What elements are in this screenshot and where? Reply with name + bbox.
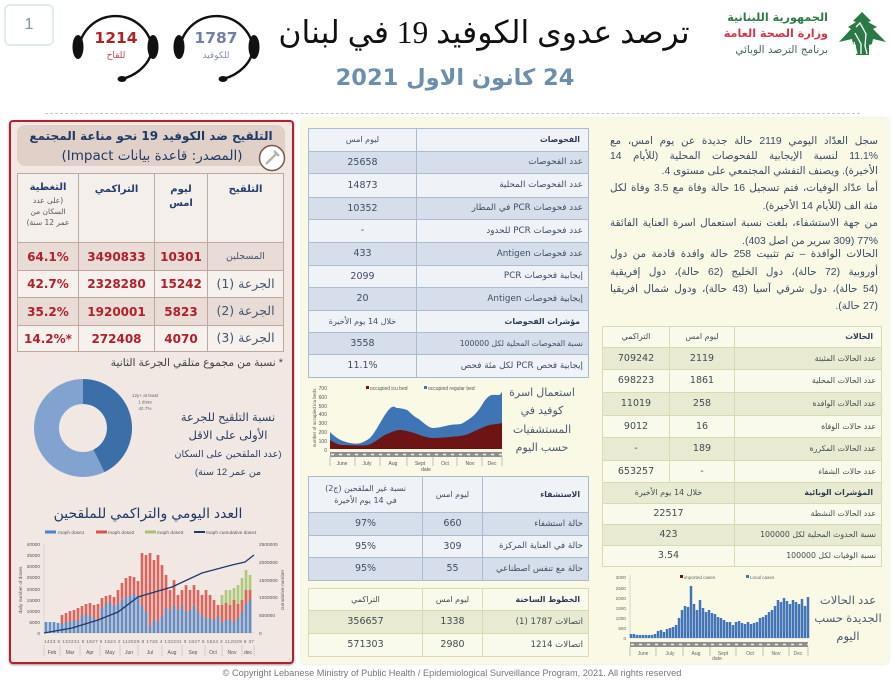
table: hotlines: اتصالات 1214 <box>531 640 583 650</box>
hotline headset: covid 1787: 1787 <box>194 29 238 47</box>
table: cases: 9012 <box>624 421 648 432</box>
chart: hospital bed occupancy: 500 <box>319 404 327 410</box>
page number box <box>4 4 54 46</box>
icon: syringe badge <box>258 144 286 172</box>
ministry logo text: الجمهورية اللبنانية <box>727 11 828 24</box>
chart: daily and cumulative vaccinated: Apr <box>86 650 94 656</box>
chart: hospital bed occupancy: 100 <box>319 439 327 445</box>
vaccination table: التغطية <box>30 182 66 193</box>
hotline headset: vaccine 1214: للقاح <box>107 50 125 60</box>
donut caption: من عمر 12 سنة) <box>195 467 261 478</box>
table: cases: خلال 14 يوم الأخيرة <box>635 488 702 497</box>
title: ترصد عدوى الكوفيد 19 في لبنان <box>278 15 690 50</box>
chart: daily and cumulative vaccinated: Jul <box>147 650 153 656</box>
table: tests: ليوم امس <box>346 135 379 144</box>
hotline headset: vaccine 1214: 1214 <box>94 29 138 47</box>
table: tests: 10352 <box>347 203 378 214</box>
chart: hospital bed occupancy: 0 <box>324 448 327 454</box>
table: tests: مؤشرات الفحوصات <box>505 317 580 326</box>
hospital chart caption: حسب اليوم <box>516 442 568 454</box>
vaccination table: 5823 <box>164 304 198 318</box>
vaccination heading: التلقيح ضد الكوفيد 19 نحو مناعة المجتمع <box>29 129 273 143</box>
new cases chart caption: الجديدة حسب <box>814 613 882 625</box>
chart: new cases per day: Sept <box>718 651 729 657</box>
table: tests: 2099 <box>350 271 375 282</box>
table: hotlines: 1338 <box>440 616 465 627</box>
vaccination table <box>17 173 284 352</box>
table: cases: عدد الحالات الوافدة <box>812 399 876 408</box>
chart: hospital bed occupancy: July <box>363 461 372 467</box>
chart: daily and cumulative vaccinated: 40000 <box>27 542 40 548</box>
table: cases: 698223 <box>618 375 654 386</box>
ministry logo text: برنامج الترصد الوبائي <box>735 44 828 56</box>
table: hospitalisation: 97% <box>355 518 376 529</box>
table: tests: عدد فحوصات PCR في المطار <box>472 203 583 213</box>
hospital chart caption: كوفيد في <box>521 405 563 417</box>
vaccination table: الجرعة (3) <box>216 330 275 345</box>
table: hospitalisation: حالة استشفاء <box>534 519 583 529</box>
donut caption <box>174 412 282 478</box>
table: hotlines: 571303 <box>347 639 384 650</box>
table: hospitalisation: 660 <box>443 518 462 529</box>
vaccination table: 2328280 <box>87 277 146 291</box>
donut caption: نسبة التلقيح للجرعة <box>181 412 275 424</box>
vaccination table: ليوم <box>170 184 192 195</box>
chart: daily and cumulative vaccinated: 0 <box>259 631 262 637</box>
table: cases: 11019 <box>621 398 651 409</box>
hospital chart caption: المستشفيات <box>513 424 571 436</box>
chart: new cases per day: 0 <box>623 636 626 641</box>
chart: new cases per day: 1000 <box>616 616 626 621</box>
chart: daily and cumulative vaccinated: Aug <box>168 650 177 656</box>
table: hospitalisation: حالة في العناية المركزة <box>499 541 583 551</box>
chart: hospital bed occupancy: Dec <box>488 461 497 467</box>
donut caption: (عدد الملقحين على السكان <box>174 449 282 460</box>
vaccination table: 14.2%* <box>24 332 72 346</box>
vaccination table: السكان من <box>30 207 66 216</box>
table: cases: 258 <box>693 398 711 409</box>
table: cases: 22517 <box>653 508 684 519</box>
table: hospitalisation: 95% <box>355 541 376 552</box>
chart: daily and cumulative vaccinated: moph dose1 <box>58 530 85 536</box>
new cases chart caption: عدد الحالات <box>820 595 876 607</box>
table: tests <box>308 128 589 378</box>
chart: new cases per day: 2500 <box>616 586 626 591</box>
chart: new cases per day: Dec <box>794 651 803 657</box>
table: tests: الفحوصات <box>540 135 580 144</box>
table: hospitalisation: 95% <box>355 563 376 574</box>
new cases chart caption: اليوم <box>836 631 860 643</box>
table: cases: نسبة الوفيات لكل 100000 <box>786 551 876 560</box>
panel: statistics background <box>301 118 889 664</box>
table: tests: - <box>361 225 364 236</box>
table: hotlines: 356657 <box>347 616 384 627</box>
table: cases: عدد الحالات المكررة <box>810 444 876 453</box>
table: tests: 433 <box>353 248 372 259</box>
chart: daily and cumulative vaccinated: Oct <box>209 650 217 656</box>
vaccination table: 10301 <box>160 250 202 264</box>
chart: hospital bed occupancy: 200 <box>319 430 327 436</box>
chart: new cases per day: imported cases <box>684 575 716 580</box>
chart: hospital bed occupancy: 300 <box>319 421 327 427</box>
hotline headset: covid 1787 <box>174 14 260 82</box>
table: cases: نسبة الحدوث المحلية لكل 100000 <box>760 530 876 539</box>
chart: daily and cumulative vaccinated: 10000 <box>27 609 40 615</box>
chart: new cases per day: July <box>666 651 675 657</box>
table: hospitalisation <box>308 476 589 581</box>
vaccination table: 64.1% <box>27 250 69 264</box>
table: cases: 16 <box>696 421 708 432</box>
chart: new cases per day: Oct <box>746 651 754 657</box>
chart: daily and cumulative vaccinated: Mar <box>66 650 75 656</box>
chart: hospital bed occupancy: 400 <box>319 412 327 418</box>
vaccination footnote: * نسبة من مجموع متلقي الجرعة الثانية <box>111 357 283 369</box>
hotline headset: covid 1787: للكوفيد <box>202 50 230 60</box>
chart: daily and cumulative vaccinated: 2500000 <box>259 542 278 548</box>
icon: cedar logo <box>839 12 886 55</box>
table: hospitalisation: 55 <box>446 563 459 574</box>
hospital chart caption: استعمال اسرة <box>509 387 575 399</box>
copyright footer: © Copyright Lebanese Ministry of Public Health / Epidemiological Surveillance Program, 2021. All rights reserved <box>223 668 681 678</box>
table: cases <box>602 326 882 567</box>
table: cases: التراكمي <box>622 332 650 341</box>
chart: daily and cumulative vaccinated: 1500000 <box>259 578 278 584</box>
table: hotlines: الخطوط الساخنة <box>515 595 580 604</box>
chart: daily and cumulative vaccinated: moph dose3 <box>157 530 184 536</box>
chart: daily and cumulative vaccinated: moph cumulative dose1 <box>206 530 257 536</box>
vaccination table: 4070 <box>164 332 198 346</box>
ministry logo text: وزارة الصحة العامة <box>724 27 828 40</box>
table: tests: نسبة الفحوصات المحلية لكل 100000 <box>460 339 583 348</box>
chart: hospital bed occupancy: Nov <box>466 461 475 467</box>
daily and cumulative chart heading: العدد اليومي والتراكمي للملقحين <box>54 505 242 521</box>
donut chart: first dose coverage: 42.7% <box>138 406 152 411</box>
table: tests: عدد فحوصات PCR للحدود <box>486 226 583 236</box>
chart: hospital bed occupancy: 600 <box>319 395 327 401</box>
donut chart: first dose coverage: 1 dose <box>138 400 152 404</box>
chart: hospital bed occupancy: 700 <box>319 386 327 392</box>
table: hotlines <box>308 588 589 657</box>
chart: daily and cumulative vaccinated: 20000 <box>27 587 40 593</box>
table: cases: 3.54 <box>658 550 679 561</box>
table: tests: خلال 14 يوم الأخيرة <box>329 316 396 326</box>
chart: hospital bed occupancy: Oct <box>441 461 449 467</box>
hotline headset: vaccine 1214 <box>72 14 158 82</box>
chart: daily and cumulative vaccinated: Nov <box>228 650 237 656</box>
table: cases: ليوم امس <box>685 332 719 341</box>
chart: new cases per day <box>616 575 810 662</box>
summary text block: أوروبية (72 حالة)، دول الخليج (62 حالة)، دول إفريقية <box>610 267 878 278</box>
chart: daily and cumulative vaccinated: Feb <box>48 650 57 656</box>
chart: new cases per day: Local cases <box>750 575 775 580</box>
summary text block: الحالات الوافدة – تم تثبيت 258 حالة وافدة قادمة من دول <box>610 249 878 260</box>
table: hospitalisation: ليوم امس <box>436 490 469 498</box>
ministry logo text <box>724 11 828 56</box>
chart: new cases per day: 2000 <box>616 596 626 601</box>
vaccination table: 15242 <box>160 277 202 291</box>
chart: new cases per day: 3000 <box>616 575 626 580</box>
table: hospitalisation: نسبة غير الملقحين (ج2) <box>325 484 406 493</box>
table: hospitalisation: الاستشفاء <box>540 490 580 499</box>
table: hotlines: التراكمي <box>351 594 380 604</box>
chart: hospital bed occupancy: June <box>337 461 348 467</box>
vaccination heading band <box>17 125 285 166</box>
chart: hospital bed occupancy <box>312 386 502 473</box>
table: cases: 2119 <box>690 353 714 364</box>
donut caption: الأولى على الاقل <box>188 430 268 442</box>
table: tests: 11.1% <box>347 360 378 371</box>
vaccination table: (على عدد <box>33 196 63 204</box>
vaccination table: الجرعة (1) <box>216 276 275 291</box>
table: hotlines: اتصالات 1787 (1) <box>516 617 583 627</box>
table: cases: عدد حالات الوفاة <box>821 422 876 431</box>
table: cases: 423 <box>659 529 678 540</box>
vaccination table: التراكمي <box>95 184 138 195</box>
table: tests: إيجابية فحوصات Antigen <box>487 294 583 304</box>
table: tests: 14873 <box>347 180 378 191</box>
chart: hospital bed occupancy: occupied regular bed <box>428 386 475 392</box>
chart: hospital bed occupancy: occupied icu bed <box>370 386 408 392</box>
chart: new cases per day: 1500 <box>616 606 626 611</box>
chart: new cases per day: 500 <box>618 626 626 631</box>
summary text block: (54 حالة)، دول شرقي آسيا (43 حالة)، ودول شمال افريقيا <box>610 284 878 295</box>
table: hotlines: ليوم امس <box>436 594 469 604</box>
table: hotlines: 2980 <box>440 639 465 650</box>
dashed divider <box>45 113 860 114</box>
summary text block: 77% (309 سرير من اصل 403). <box>742 236 878 247</box>
chart: new cases per day: Nov <box>772 651 781 657</box>
chart: daily and cumulative vaccinated: 25000 <box>27 575 40 581</box>
chart: daily and cumulative vaccinated: 30000 <box>27 564 40 570</box>
table: hospitalisation: 309 <box>443 541 462 552</box>
chart: new cases per day: date <box>712 656 722 662</box>
vaccination table: عمر 12 سنة) <box>27 218 69 227</box>
chart: daily and cumulative vaccinated: cumulative number <box>280 569 286 610</box>
vaccination table: 1920001 <box>87 304 146 318</box>
chart: hospital bed occupancy: date <box>421 467 431 473</box>
table: tests: 20 <box>356 293 369 304</box>
vaccination table: امس <box>169 198 193 208</box>
table: hospitalisation: في 14 يوم الأخيرة <box>334 496 397 504</box>
table: cases: - <box>700 466 704 477</box>
summary text block: أما عدّاد الوفيات، فتم تسجيل 16 حالة وفاة مع 3.5 وفاة لكل <box>610 183 878 194</box>
chart: daily and cumulative vaccinated: 0 <box>37 631 40 637</box>
table: cases: 1861 <box>690 375 714 386</box>
table: tests: عدد الفحوصات المحلية <box>499 180 583 190</box>
chart: new cases per day: Aug <box>692 651 701 657</box>
vaccination source line: (المصدر: قاعدة بيانات Impact) <box>62 148 242 164</box>
summary text block: مئة الف (للأيام 14 الأخيرة). <box>763 201 878 212</box>
panel: vaccination <box>9 120 294 664</box>
table: cases: عدد الحالات النشطة <box>811 509 876 518</box>
vaccination table: 35.2% <box>27 304 69 318</box>
summary text block: (27 حالة). <box>835 301 878 312</box>
vaccination table: التلقيح <box>229 184 262 195</box>
vaccination table: 272408 <box>91 332 142 346</box>
chart: hospital bed occupancy: Aug <box>389 461 398 467</box>
table: tests: إيجابية فحوصات PCR <box>504 271 583 281</box>
summary text block: من جهة الاستشفاء، بلغت نسبة استعمال اسرة العناية الفائقة <box>610 218 878 229</box>
chart: daily and cumulative vaccinated: Sep <box>189 650 198 656</box>
chart: daily and cumulative vaccinated: May <box>105 650 115 656</box>
chart: daily and cumulative vaccinated: 15000 <box>27 598 40 604</box>
donut chart: first dose coverage <box>34 379 159 477</box>
table: cases: عدد حالات الشفاء <box>818 467 876 476</box>
table: tests: إيجابية فحص PCR لكل مئة فحص <box>461 361 583 371</box>
summary text block <box>610 136 878 312</box>
chart: hospital bed occupancy: number of occupied icu beds <box>312 388 317 447</box>
table: tests: عدد الفحوصات <box>528 157 583 167</box>
vaccination table: 42.7% <box>27 277 69 291</box>
chart: daily and cumulative vaccinated: 500000 <box>259 613 275 619</box>
table: tests: 25658 <box>347 157 378 168</box>
page number box: 1 <box>25 16 33 33</box>
chart: daily and cumulative vaccinated: 5000 <box>29 620 40 626</box>
summary text block: سجل العدّاد اليومي 2119 حالة جديدة عن يوم امس، مع <box>610 136 878 147</box>
chart: new cases per day: June <box>638 651 649 657</box>
summary text block: 11.1% لنسبة الإيجابية للفحوصات المحلية (للأيام 14 <box>610 151 878 162</box>
vaccination table: الجرعة (2) <box>216 303 275 318</box>
summary text block: الأخيرة). ويصنف التفشي المجتمعي على مستوى 4. <box>662 166 878 177</box>
chart: daily and cumulative vaccinated: 2000000 <box>259 560 278 566</box>
chart: daily and cumulative vaccinated: Jun <box>125 650 133 656</box>
chart: daily and cumulative vaccinated: moph dose2 <box>108 530 135 536</box>
table: cases: 709242 <box>618 353 654 364</box>
date subtitle: 24 كانون الاول 2021 <box>336 65 574 91</box>
vaccination table: 3490833 <box>87 250 146 264</box>
table: hospitalisation: حالة مع تنفس اصطناعي <box>496 564 583 574</box>
table: cases: المؤشرات الوبائية <box>804 488 873 497</box>
table: tests: 3558 <box>350 338 375 349</box>
chart: daily and cumulative vaccinated: 35000 <box>27 553 40 559</box>
table: cases: الحالات <box>845 332 873 341</box>
table: cases: - <box>634 443 638 454</box>
chart: daily and cumulative vaccinated <box>18 530 286 656</box>
donut chart: first dose coverage: 12y+ at least <box>132 393 159 398</box>
table: cases: عدد الحالات المحلية <box>812 376 876 385</box>
chart: hospital bed occupancy: Sept <box>415 461 426 467</box>
chart: daily and cumulative vaccinated: 1000000 <box>259 595 278 601</box>
table: tests: عدد فحوصات Antigen <box>497 249 583 259</box>
chart: daily and cumulative vaccinated: dec <box>244 650 253 656</box>
chart: daily and cumulative vaccinated: 1423 6 132231 9 1827 6 1524 2 112029 8 1726 4 132231 9 1827 6 1524 2 112029 8 37 <box>44 639 254 644</box>
chart: daily and cumulative vaccinated: daily number of doses <box>18 566 24 613</box>
hospital chart caption <box>509 387 575 454</box>
new cases chart caption <box>814 595 882 643</box>
table: cases: عدد الحالات المثبتة <box>815 354 876 363</box>
vaccination table: المسجلين <box>226 251 265 262</box>
table: cases: 653257 <box>618 466 654 477</box>
table: cases: 189 <box>693 443 711 454</box>
